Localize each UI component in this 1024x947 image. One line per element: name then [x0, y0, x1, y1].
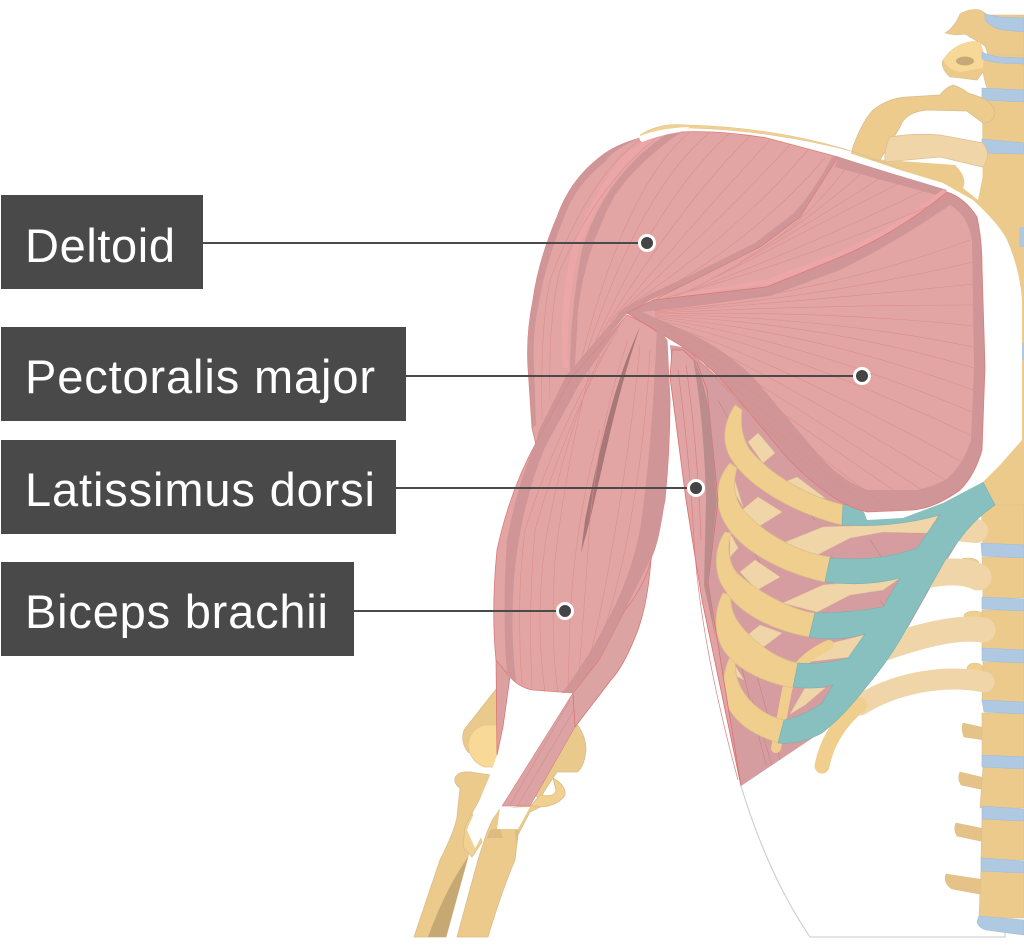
deltoid fibres [542, 132, 825, 420]
front ribs [716, 405, 843, 743]
vertebral foramen [956, 56, 974, 66]
label: Latissimus dorsi [1, 440, 704, 534]
shoulder bone band above the muscle [640, 124, 900, 168]
icon: radius shaded side [428, 857, 468, 937]
icon: humerus medial condyle [530, 720, 586, 800]
clavicle [850, 85, 995, 160]
intercostal fibres [718, 400, 900, 765]
intercostal muscle behind the ribs [670, 345, 961, 786]
icon: radius [414, 772, 490, 937]
biceps fibres [520, 330, 650, 692]
back rib visible patches [730, 433, 940, 714]
white gap below tendon [497, 807, 530, 829]
label: Pectoralis major [1, 327, 870, 421]
deltoid middle dark band [570, 133, 680, 375]
intervertebral discs [977, 14, 1024, 935]
icon: radial tuberosity [463, 813, 482, 857]
pectoralis major [627, 157, 985, 512]
first rib, back portion [885, 134, 988, 167]
lateral forearm muscle [573, 560, 651, 727]
icon: ulna shading [487, 828, 519, 845]
deltoid [528, 127, 838, 445]
clavicular head [653, 157, 947, 300]
deltoid rear dark band [528, 138, 640, 428]
latissimus dorsi [670, 350, 741, 786]
label: Deltoid: Deltoid [25, 219, 175, 272]
rib nubs [957, 558, 979, 568]
white gaps at the elbow [467, 677, 573, 848]
forearm tendon [502, 693, 575, 806]
icon: humerus lateral condyle [463, 688, 497, 765]
label: Pectoralis major: Pectoralis major [25, 350, 375, 403]
label: Biceps brachii [1, 562, 572, 656]
clavicular dark edge [835, 157, 947, 196]
sternal head [627, 192, 985, 512]
pectoral fibres [655, 165, 974, 502]
torso outline [741, 786, 1005, 937]
icon: ulna [457, 805, 540, 937]
icon: trochlea hook [530, 778, 565, 807]
back ribs [860, 528, 984, 705]
label: Biceps brachii: Biceps brachii [25, 585, 328, 638]
biceps groove [581, 327, 640, 553]
label: Deltoid [1, 195, 654, 289]
spine and cervical vertebrae [845, 10, 1024, 918]
lower floating rib [822, 705, 860, 766]
forearm tendon fibres [510, 700, 574, 805]
sternal light inner area [642, 205, 974, 490]
costal cartilage [778, 482, 995, 743]
clavicular light tendon [655, 190, 948, 299]
biceps right shade [562, 325, 670, 693]
brachialis outer strip [496, 660, 510, 755]
white cap over the deltoid top [639, 127, 690, 142]
deltoid light tendon band [562, 132, 668, 368]
biceps left shade [504, 315, 627, 682]
white halo around muscles [640, 127, 1022, 520]
icon: capitulum [468, 725, 497, 767]
small descending rib [776, 645, 829, 748]
biceps brachii [494, 315, 670, 693]
label: Latissimus dorsi: Latissimus dorsi [25, 463, 375, 516]
deltoid lower dark band [536, 157, 838, 445]
elbow bones [414, 688, 586, 937]
